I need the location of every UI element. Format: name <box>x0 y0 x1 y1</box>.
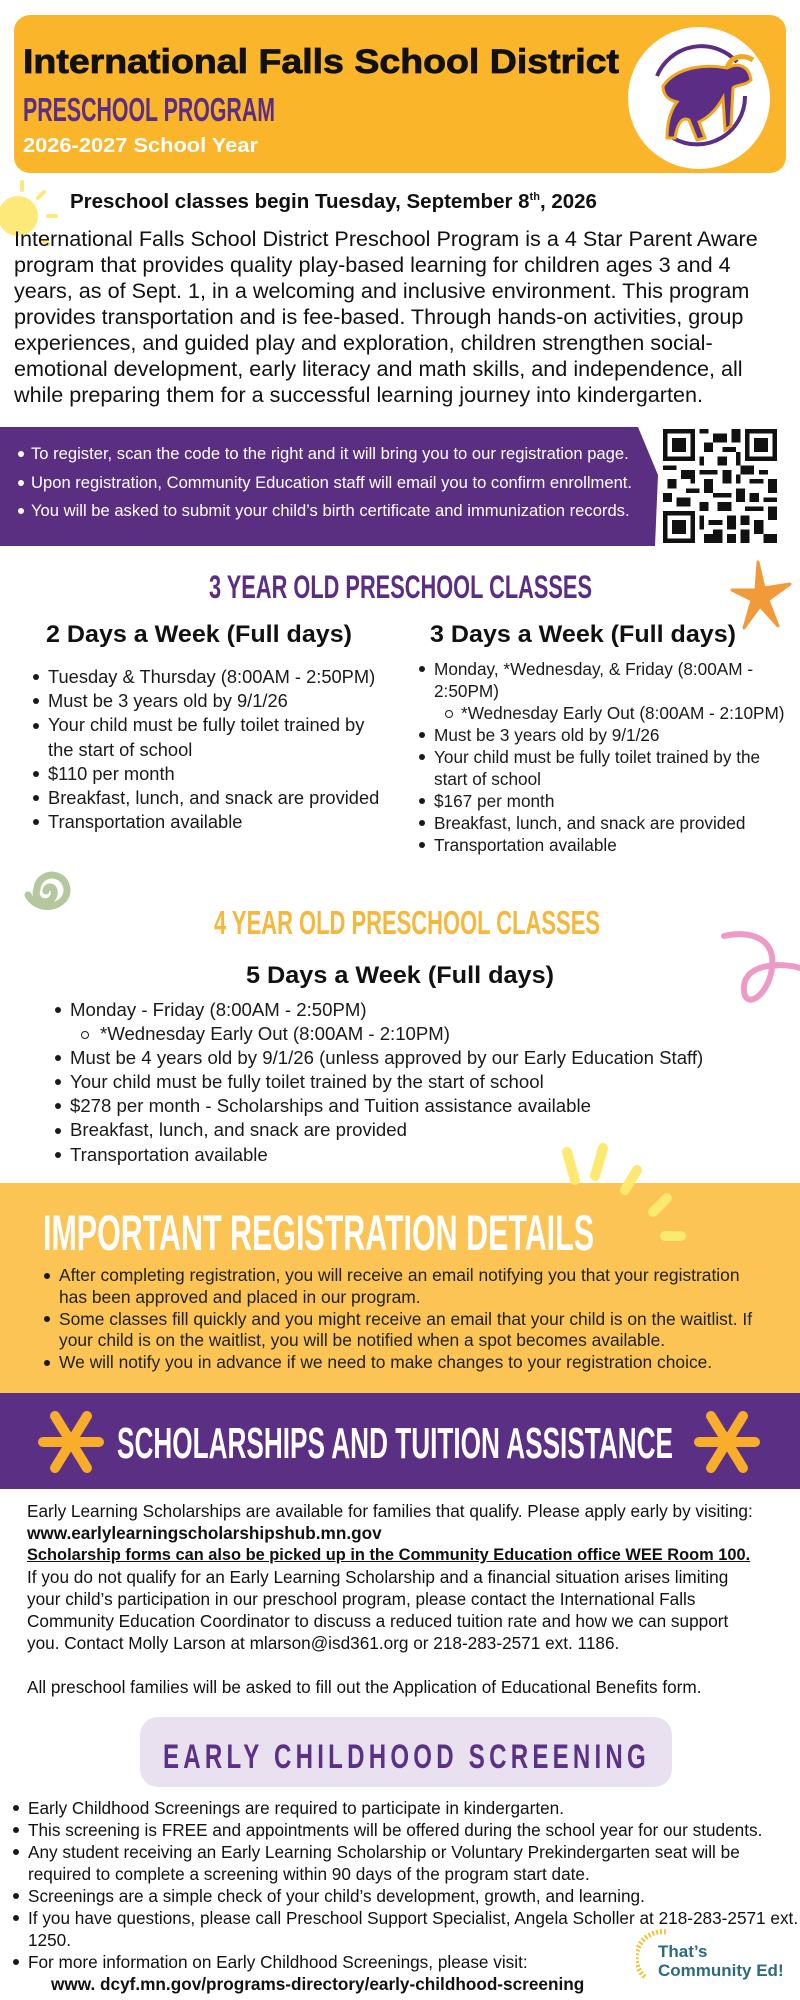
panel: scholarships band <box>0 1393 800 1489</box>
list: screening details: required to complete a screening within 90 days of the program start date. <box>28 1864 590 1884</box>
list: 3 day details: *Wednesday Early Out (8:00AM - 2:10PM) <box>461 703 785 723</box>
text block: intro paragraph: emotional development, early literacy and math skills, and independence, all <box>14 356 743 381</box>
text block: scholarship info: Community Education Coordinator to discuss a reduced tuition rate and how we can support <box>27 1611 728 1631</box>
icon: That's Community Ed! logo <box>636 1929 784 1980</box>
icon: That's Community Ed! logo: Community Ed! <box>658 1961 784 1980</box>
list: screening details: Screenings are a simple check of your child’s development, growth, and learning. <box>28 1886 645 1906</box>
heading: 4 year old classes: 4 YEAR OLD PRESCHOOL CLASSES <box>214 904 600 940</box>
list: 3 day details: Breakfast, lunch, and snack are provided <box>434 813 745 833</box>
list: 3 day details: Your child must be fully toilet trained by the <box>434 747 760 767</box>
text block: intro paragraph: experiences, and guided play and exploration, children strengthen social- <box>14 330 713 355</box>
text block: scholarship info: If you do not qualify for an Early Learning Scholarship and a financial situation arises limiting <box>27 1567 728 1587</box>
list: 3 day details <box>419 659 785 855</box>
list: 2 day details: Your child must be fully toilet trained by <box>48 714 364 735</box>
heading: start date: Preschool classes begin Tuesday, September 8th, 2026 <box>70 190 597 213</box>
registration details bullets <box>44 1265 752 1372</box>
title: 2026-2027 School Year <box>23 135 258 157</box>
heading: day options: 2 Days a Week (Full days) <box>46 621 352 648</box>
list: 5 day details: Breakfast, lunch, and snack are provided <box>70 1119 407 1140</box>
list: 2 day details: Transportation available <box>48 811 242 832</box>
registration bullets: To register, scan the code to the right and it will bring you to our registration page. <box>31 444 629 463</box>
list: 2 day details <box>33 666 379 832</box>
list: 3 day details: Must be 3 years old by 9/1/26 <box>434 725 659 745</box>
text block: scholarship info: Early Learning Scholarships are available for families that qualify. Please apply early by visiting: <box>27 1501 753 1521</box>
list: 3 day details: start of school <box>434 769 541 789</box>
list: screening details: Early Childhood Screenings are required to participate in kindergarten. <box>28 1798 564 1818</box>
icon: yellow rays <box>562 1143 686 1241</box>
text block: intro paragraph: International Falls School District Preschool Program is a 4 Star Parent Aware <box>14 226 758 251</box>
text block: scholarship info: your child’s participation in our preschool program, please contact the International Falls <box>27 1589 695 1609</box>
list: 5 day details: Monday - Friday (8:00AM - 2:50PM) <box>70 999 367 1020</box>
list: screening details: 1250. <box>28 1930 71 1950</box>
text block: intro paragraph: years, as of Sept. 1, in a welcoming and inclusive environment. This program <box>14 278 749 303</box>
title: PRESCHOOL PROGRAM <box>23 91 275 128</box>
title: International Falls School District <box>23 43 619 81</box>
icon: orange star <box>730 560 792 630</box>
registration bullets: Upon registration, Community Education staff will email you to confirm enrollment. <box>31 472 632 492</box>
list: screening details <box>13 1798 798 1994</box>
registration bullets <box>18 444 632 520</box>
text block: intro paragraph: while preparing them for a successful learning journey into kindergarten. <box>14 382 703 407</box>
list: 3 day details: Monday, *Wednesday, & Friday (8:00AM - <box>434 659 753 679</box>
heading: scholarships and tuition assistance <box>38 1411 760 1473</box>
header banner <box>14 15 786 173</box>
list: 2 day details: Must be 3 years old by 9/1/26 <box>48 690 288 711</box>
list: 2 day details: $110 per month <box>48 763 175 784</box>
list: screening details: Any student receiving an Early Learning Scholarship or Voluntary Prekindergarten seat will be <box>28 1842 740 1862</box>
text block: intro paragraph <box>14 226 758 407</box>
text block: scholarship info: you. Contact Molly Larson at mlarson@isd361.org or 218-283-2571 ext. 1186. <box>27 1633 619 1653</box>
panel: registration band <box>0 427 658 546</box>
registration details bullets: has been approved and placed in our program. <box>59 1287 421 1307</box>
list: 2 day details: Breakfast, lunch, and snack are provided <box>48 787 379 808</box>
heading: day options: 3 Days a Week (Full days) <box>430 621 736 648</box>
list: 5 day details <box>55 999 703 1165</box>
heading: 3 year old classes: 3 YEAR OLD PRESCHOOL CLASSES <box>209 569 592 605</box>
panel: important registration details <box>0 1183 800 1394</box>
list: 5 day details: Transportation available <box>70 1144 268 1165</box>
text block: scholarship info: All preschool families will be asked to fill out the Application of Educational Benefits form. <box>27 1677 701 1697</box>
registration details bullets: your child is on the waitlist, you will be notified when a spot becomes available. <box>59 1330 665 1350</box>
icon: green spiral <box>24 872 70 910</box>
list: screening details: www. dcyf.mn.gov/programs-directory/early-childhood-screening <box>51 1974 584 1994</box>
text block: intro paragraph: program that provides quality play-based learning for children ages 3 and 4 <box>14 252 731 277</box>
text block: scholarship info <box>27 1501 753 1697</box>
list: screening details: If you have questions, please call Preschool Support Specialist, Angela Scholler at 218-283-2571 ext. <box>28 1908 798 1928</box>
icon: That's Community Ed! logo: That’s <box>658 1942 707 1961</box>
registration bullets: You will be asked to submit your child’s birth certificate and immunization records. <box>31 501 630 520</box>
registration details bullets: After completing registration, you will receive an email notifying you that your registration <box>59 1265 740 1285</box>
list: 5 day details: Your child must be fully toilet trained by the start of school <box>70 1071 544 1092</box>
heading: day options <box>46 621 736 648</box>
list: 2 day details: the start of school <box>48 739 192 760</box>
text block: scholarship info: www.earlylearningscholarshipshub.mn.gov <box>27 1523 382 1543</box>
list: screening details: For more information on Early Childhood Screenings, please visit: <box>28 1952 528 1972</box>
list: 3 day details: Transportation available <box>434 835 617 855</box>
text block: scholarship info: Scholarship forms can also be picked up in the Community Education office WEE Room 100. <box>27 1546 750 1564</box>
heading: early childhood screening pill <box>140 1717 672 1787</box>
list: 2 day details: Tuesday & Thursday (8:00AM - 2:50PM) <box>48 666 375 687</box>
icon: pink squiggle <box>721 931 800 1003</box>
icon: mustang logo <box>628 27 770 169</box>
list: 5 day details: Must be 4 years old by 9/1/26 (unless approved by our Early Education Staff) <box>70 1047 703 1068</box>
list: 5 day details: $278 per month - Scholarships and Tuition assistance available <box>70 1095 591 1116</box>
list: screening details: This screening is FREE and appointments will be offered during the school year for our students. <box>28 1820 762 1840</box>
icon: QR code <box>663 429 777 543</box>
icon: sun <box>0 180 58 246</box>
registration details bullets: Some classes fill quickly and you might receive an email that your child is on the waitlist. If <box>59 1309 752 1329</box>
list: 3 day details: $167 per month <box>434 791 554 811</box>
title <box>23 43 619 157</box>
text block: intro paragraph: provides transportation and is fee-based. Through hands-on activities, group <box>14 304 743 329</box>
registration details bullets: We will notify you in advance if we need to make changes to your registration choice. <box>59 1352 712 1372</box>
list: 5 day details: *Wednesday Early Out (8:00AM - 2:10PM) <box>100 1023 450 1044</box>
list: 3 day details: 2:50PM) <box>434 681 499 701</box>
